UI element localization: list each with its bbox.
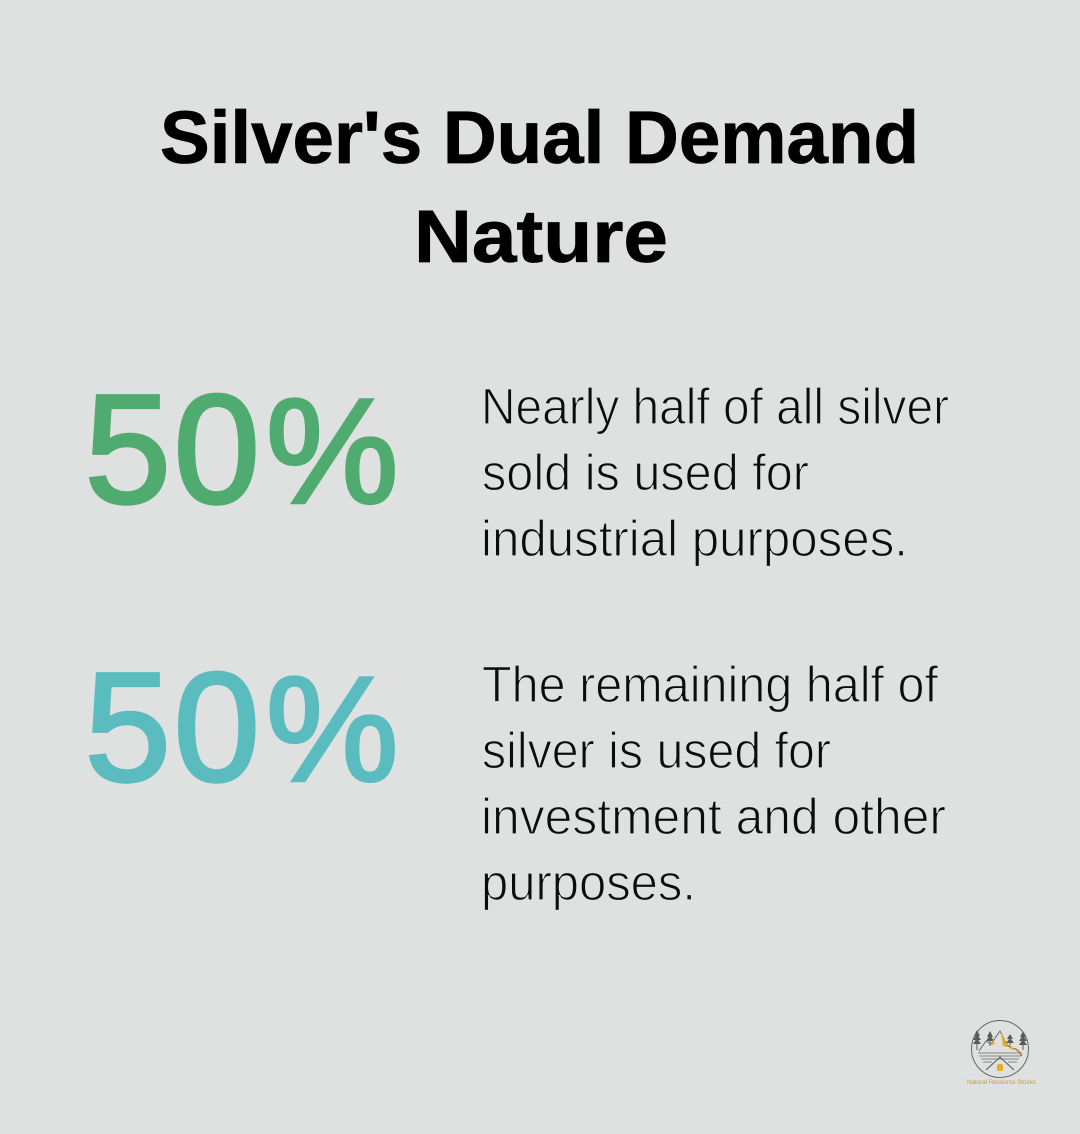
text: investment description: investment and other [481,788,946,845]
text: industrial description [481,378,949,567]
text: investment description: The remaining half of [482,656,939,713]
text: industrial description: industrial purposes. [481,510,908,567]
stat: 50% industrial: % [266,368,398,534]
title: Nature [414,195,668,278]
text: investment description: silver is used for [482,722,831,779]
text: industrial description: Nearly half of all silver [481,378,949,435]
logo: Natural Resource Stocks: Natural Resource Stocks [967,1079,1036,1086]
stat: 50% investment: 0 [174,640,260,814]
text: industrial description: sold is used for [482,444,809,501]
text: investment description: purposes. [481,854,696,911]
title [160,96,919,278]
stat: 50% investment: 5 [85,640,171,814]
text: investment description [481,656,946,911]
logo: Natural Resource Stocks [967,1020,1036,1086]
stat: 50% industrial: 5 [85,362,171,536]
stat: 50% industrial: 0 [174,362,260,536]
title: Silver's Dual Demand [160,96,919,179]
stat: 50% investment: % [266,646,398,812]
